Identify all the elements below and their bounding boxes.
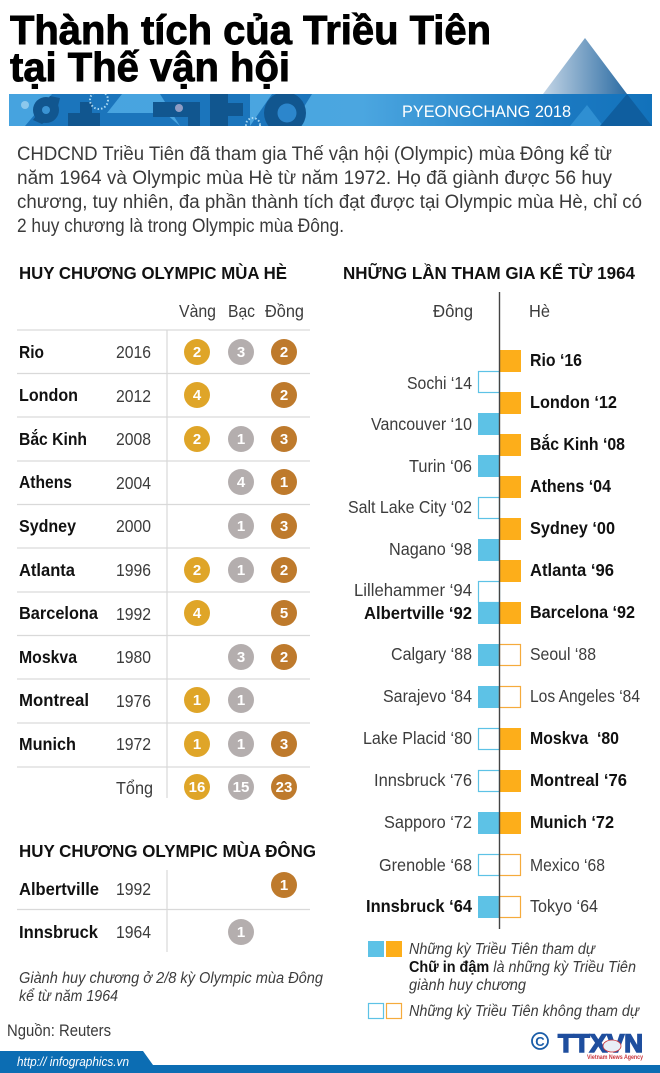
row: Bắc Kinh: Bắc Kinh — [19, 428, 87, 449]
logo: TTXVN — [532, 1030, 643, 1061]
note: winter medals — [19, 970, 323, 1005]
row: Atlanta: Atlanta — [19, 560, 75, 580]
logo: TTXVN: C — [535, 1034, 545, 1049]
intro text: chương, tuy nhiên, đa phần thành tích đạt được tại Olympic mùa Hè, chỉ có — [17, 192, 642, 213]
row: Bắc Kinh: 1 — [237, 431, 245, 448]
row: Rio: 2016 — [116, 342, 151, 362]
row: Rio — [19, 339, 297, 365]
column headers: Đông — [433, 301, 473, 321]
row: Atlanta: 2 — [280, 562, 288, 579]
row: Bắc Kinh — [19, 426, 297, 452]
row: London: 2012 — [116, 386, 151, 406]
row: Barcelona: 4 — [193, 605, 202, 622]
row: Sydney: Sydney — [19, 516, 76, 536]
heading: participation timeline: NHỮNG LẦN THAM GIA KỂ TỪ 1964 — [343, 262, 635, 283]
row: Albertville: 1992 — [116, 879, 151, 899]
row: totals: 23 — [276, 779, 292, 796]
legend: Chữ in đậm là những kỳ Triều Tiên — [409, 959, 636, 976]
intro text — [17, 144, 642, 237]
column headers: Vàng — [179, 301, 216, 321]
summer labels: Seoul ‘88 — [530, 644, 596, 664]
row: Athens: 2004 — [116, 473, 151, 493]
footer bar: http:// infographics.vn — [17, 1054, 129, 1069]
column headers — [433, 301, 550, 321]
note: winter medals: Giành huy chương ở 2/8 kỳ Olympic mùa Đông — [19, 970, 323, 987]
row: Innsbruck: 1 — [237, 924, 245, 941]
legend: giành huy chương — [409, 977, 526, 994]
summer labels: Bắc Kinh ‘08 — [530, 433, 625, 454]
legend: Những kỳ Triều Tiên không tham dự — [409, 1003, 640, 1020]
winter labels — [348, 373, 472, 916]
row: Munich: 3 — [280, 736, 288, 753]
footer bar — [0, 1051, 660, 1073]
winter labels: Salt Lake City ‘02 — [348, 497, 472, 517]
row: Innsbruck — [19, 919, 254, 945]
row: Munich: 1 — [237, 736, 245, 753]
winter labels: Innsbruck ‘76 — [374, 770, 472, 790]
row: totals: 15 — [233, 779, 249, 796]
row: Barcelona — [19, 600, 297, 626]
heading: summer medals: HUY CHƯƠNG OLYMPIC MÙA HÈ — [19, 262, 287, 283]
summer labels: Los Angeles ‘84 — [530, 686, 640, 706]
row: totals: 16 — [189, 779, 205, 796]
title: tại Thế vận hội — [10, 44, 290, 90]
row: Albertville — [19, 872, 297, 899]
summer labels: Montreal ‘76 — [530, 770, 627, 790]
summer labels — [530, 350, 640, 916]
row: Montreal: 1 — [193, 692, 201, 709]
row: totals — [116, 774, 297, 800]
summer labels: Rio ‘16 — [530, 350, 582, 370]
row: Munich: 1972 — [116, 734, 151, 754]
row: Barcelona: Barcelona — [19, 603, 98, 623]
row: Moskva: 2 — [280, 649, 288, 666]
row: Montreal — [19, 687, 254, 713]
winter labels: Sochi ‘14 — [407, 373, 472, 393]
row: Atlanta: 1996 — [116, 560, 151, 580]
column headers: Đồng — [265, 301, 304, 321]
logo: TTXVN: Vietnam News Agency — [587, 1054, 643, 1061]
summer labels: Barcelona ‘92 — [530, 602, 635, 622]
column headers: Hè — [529, 301, 550, 321]
legend: Những kỳ Triều Tiên tham dự — [409, 941, 596, 958]
row: Moskva: 1980 — [116, 647, 151, 667]
row: Rio: 2 — [280, 344, 288, 361]
source: Nguồn: Reuters — [7, 1022, 111, 1040]
heading: winter medals: HUY CHƯƠNG OLYMPIC MÙA ĐÔNG — [19, 840, 316, 861]
timeline: participation — [348, 292, 640, 929]
banner: Pyeongchang 2018 — [9, 94, 652, 126]
row: London — [19, 382, 297, 408]
winter labels: Innsbruck ‘64 — [366, 896, 472, 916]
title — [10, 7, 491, 90]
row: Athens — [19, 469, 297, 495]
row: London: London — [19, 385, 78, 405]
winter labels: Albertville ‘92 — [364, 603, 472, 623]
summer labels: Moskva ‘80 — [530, 728, 619, 748]
row: Innsbruck: 1964 — [116, 922, 151, 942]
summer labels: Munich ‘72 — [530, 812, 614, 832]
winter labels: Calgary ‘88 — [391, 644, 472, 664]
row: Montreal: Montreal — [19, 690, 89, 710]
row: Barcelona: 5 — [280, 605, 288, 622]
row: Rio: Rio — [19, 342, 44, 362]
summer labels: Atlanta ‘96 — [530, 560, 614, 580]
title: Thành tích của Triều Tiên — [10, 7, 491, 53]
summer labels: Athens ‘04 — [530, 476, 611, 496]
note: winter medals: kể từ năm 1964 — [19, 988, 118, 1005]
column headers: Bạc — [228, 301, 255, 321]
winter labels: Grenoble ‘68 — [379, 855, 472, 875]
winter labels: Vancouver ‘10 — [371, 414, 472, 434]
summer labels: London ‘12 — [530, 392, 617, 412]
summer labels: Mexico ‘68 — [530, 855, 605, 875]
row: London: 2 — [280, 387, 288, 404]
row: Moskva — [19, 644, 297, 670]
row: Athens: 4 — [237, 474, 246, 491]
row: Atlanta — [19, 557, 297, 583]
winter labels: Sapporo ‘72 — [384, 812, 472, 832]
row: Moskva: 3 — [237, 649, 245, 666]
winter labels: Nagano ‘98 — [389, 539, 472, 559]
intro text: CHDCND Triều Tiên đã tham gia Thế vận hội (Olympic) mùa Đông kể từ — [17, 144, 612, 165]
row: Rio: 2 — [193, 344, 201, 361]
row: Montreal: 1976 — [116, 691, 151, 711]
intro text: năm 1964 và Olympic mùa Hè từ năm 1972. Họ đã giành được 56 huy — [17, 168, 612, 189]
logo: TTXVN: TTXVN — [558, 1030, 643, 1058]
row: Munich: Munich — [19, 734, 76, 754]
summer squares — [500, 350, 521, 918]
table: summer medals — [17, 301, 310, 800]
row: Munich: 1 — [193, 736, 201, 753]
winter labels: Sarajevo ‘84 — [383, 686, 472, 706]
winter squares — [478, 372, 500, 918]
row: Atlanta: 2 — [193, 562, 201, 579]
row: Montreal: 1 — [237, 692, 245, 709]
legend — [368, 941, 640, 1020]
table: winter medals — [17, 870, 310, 952]
row: London: 4 — [193, 387, 202, 404]
row: Athens: 1 — [280, 474, 288, 491]
row: Moskva: Moskva — [19, 647, 77, 667]
row: totals: Tổng — [116, 778, 153, 798]
row: Albertville: 1 — [280, 877, 288, 894]
row: Sydney: 3 — [280, 518, 288, 535]
row: Rio: 3 — [237, 344, 245, 361]
row: Atlanta: 1 — [237, 562, 245, 579]
banner: Pyeongchang 2018: PYEONGCHANG 2018 — [402, 102, 571, 121]
icon: mountain — [543, 38, 627, 94]
row: Innsbruck: Innsbruck — [19, 922, 98, 942]
winter labels: Lake Placid ‘80 — [363, 728, 472, 748]
row: Bắc Kinh: 2008 — [116, 429, 151, 449]
row: Bắc Kinh: 2 — [193, 431, 201, 448]
row: Sydney: 1 — [237, 518, 245, 535]
row: Athens: Athens — [19, 472, 72, 492]
winter labels: Turin ‘06 — [409, 456, 472, 476]
row: Barcelona: 1992 — [116, 604, 151, 624]
summer labels: Sydney ‘00 — [530, 518, 615, 538]
row: Sydney: 2000 — [116, 516, 151, 536]
row: Bắc Kinh: 3 — [280, 431, 288, 448]
intro text: 2 huy chương là trong Olympic mùa Đông. — [17, 216, 344, 237]
row: Albertville: Albertville — [19, 879, 99, 899]
summer labels: Tokyo ‘64 — [530, 896, 598, 916]
row: Sydney — [19, 513, 297, 539]
row: Munich — [19, 731, 297, 757]
winter labels: Lillehammer ‘94 — [354, 580, 472, 600]
column headers — [179, 301, 304, 321]
